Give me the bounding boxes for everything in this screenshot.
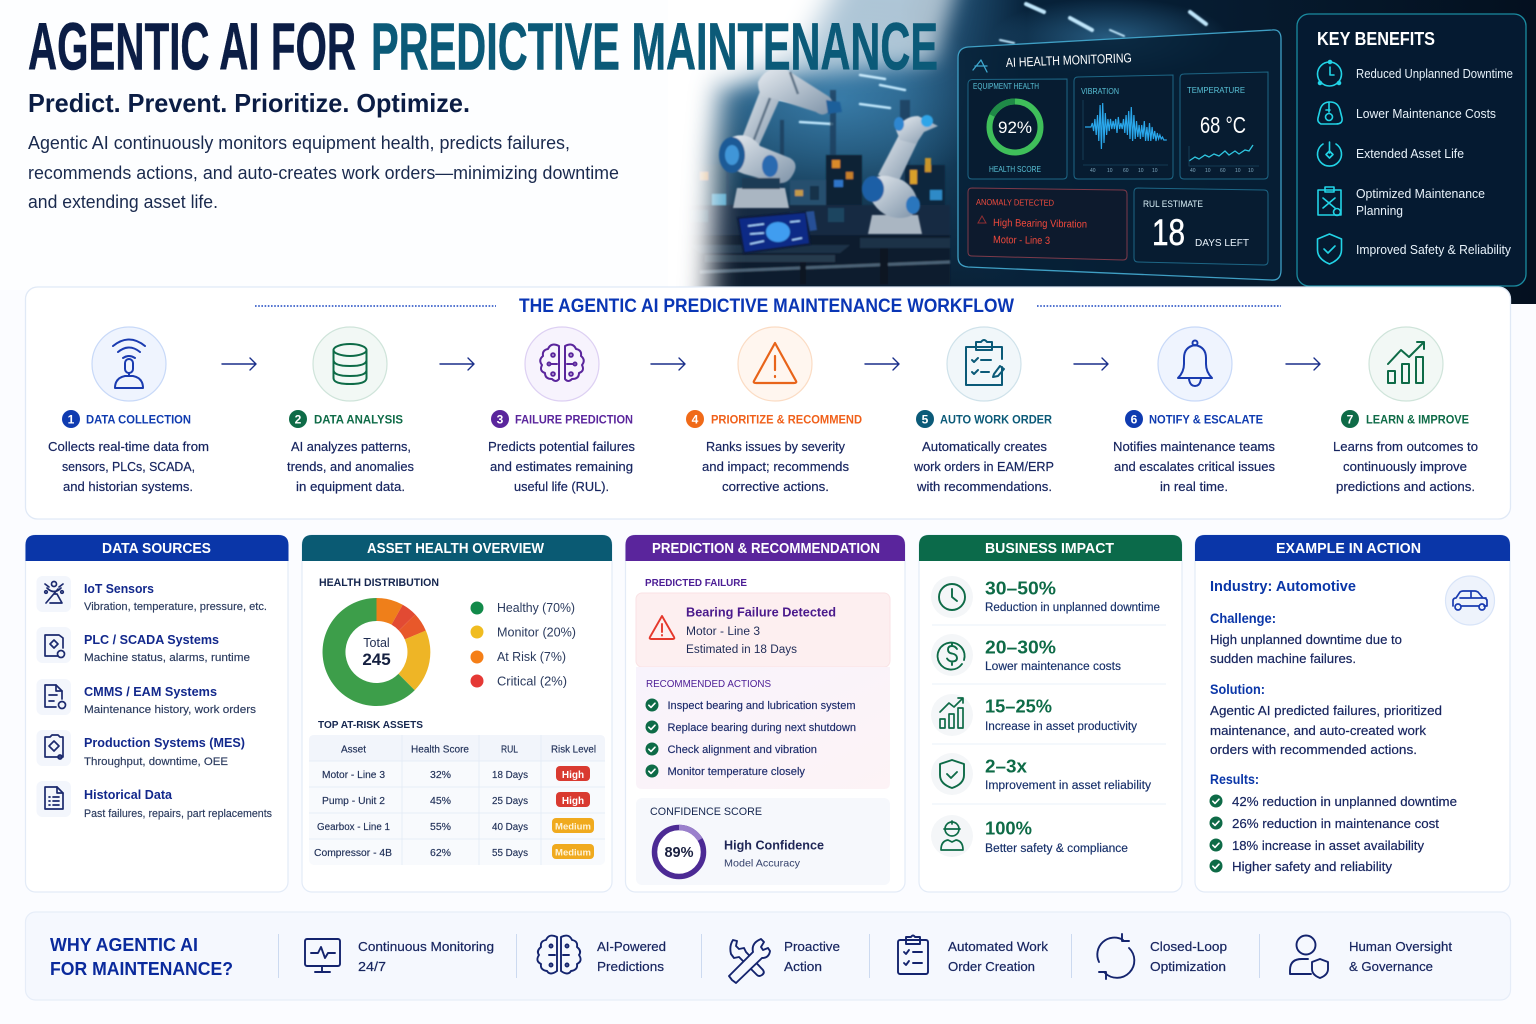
step 3: failure prediction: 3 [497,412,504,426]
step 2: data analysis [287,327,414,494]
benefit: reduced downtime [1318,60,1513,86]
hero banner [0,0,1536,330]
step 5: auto work order: with recommendations. [916,479,1052,494]
step 1: data collection: sensors, PLCs, SCADA, [62,459,195,474]
factory photo background [0,0,1536,330]
heading: PREDICTION & RECOMMENDATION [652,541,880,557]
item: automated work order [898,936,1049,974]
source: PLC SCADA: PLC / SCADA Systems [84,632,219,647]
step 2: data analysis: 2 [295,412,302,426]
at-risk table: High [562,770,584,781]
recommended actions [636,667,890,789]
step 3: failure prediction: FAILURE PREDICTION [515,412,633,426]
RUL estimate card [1134,188,1268,265]
donut chart: 245 [362,650,391,669]
legend: Monitor (20%) [497,626,576,640]
vibration card [1074,75,1173,179]
vibration card: 40 [1090,168,1096,174]
why heading [50,935,233,979]
step 6: notify and escalate: and escalates critical issues [1114,459,1275,474]
at-risk table: Risk Level [551,744,596,756]
source: CMMS EAM: CMMS / EAM Systems [84,684,217,699]
source: MES: Production Systems (MES) [84,735,245,750]
step 3: failure prediction: useful life (RUL). [514,479,609,494]
equipment health card: EQUIPMENT HEALTH [973,81,1039,91]
at-risk table: 32% [430,770,451,781]
benefit: safety [1318,234,1512,264]
item: proactive action: Action [784,959,822,974]
impact: reliability: Improvement in asset reliability [985,780,1151,792]
step 5: auto work order: AUTO WORK ORDER [940,412,1052,426]
donut chart [323,598,430,706]
step 4: prioritize and recommend [686,327,862,494]
source: MES: Throughput, downtime, OEE [84,756,228,768]
item: proactive action: Proactive [784,939,840,954]
anomaly card: High Bearing Vibration [993,217,1087,231]
step 7: learn and improve: Learns from outcomes to [1333,439,1478,454]
benefit: optimized planning: Planning [1356,204,1403,218]
at-risk table: Gearbox - Line 1 [317,822,390,833]
confidence score: Model Accuracy [724,858,801,870]
at-risk table [309,735,605,865]
at-risk table: 18 Days [492,770,528,781]
temperature card: 68 °C [1200,112,1246,138]
title: PREDICTIVE MAINTENANCE [371,10,938,84]
step 6: notify and escalate: 6 [1131,412,1138,426]
RUL estimate card: RUL ESTIMATE [1143,199,1203,209]
icon: car [1446,576,1494,625]
icon: sensor [92,327,166,401]
temperature card: 10 [1235,168,1241,174]
legend: Critical (2%) [497,674,567,688]
item: closed-loop optimization: Closed-Loop [1150,939,1227,954]
impact: safety [931,815,1128,857]
step 4: prioritize and recommend: 4 [692,412,699,426]
heading: DATA SOURCES [102,541,211,557]
at-risk table: Medium [555,822,591,832]
donut chart: Total [363,636,390,650]
item: continuous monitoring: 24/7 [358,959,386,974]
step 6: notify and escalate: NOTIFY & ESCALATE [1149,412,1263,426]
step 5: auto work order [913,327,1054,494]
at-risk table: RUL [501,744,518,756]
item: human oversight: & Governance [1349,959,1433,974]
legend: Healthy (70%) [497,601,575,615]
title [28,10,938,84]
panel: asset health overview [302,535,612,892]
step 4: prioritize and recommend: and impact; recommends [702,459,850,474]
step 3: failure prediction [488,327,635,494]
intro paragraph: recommends actions, and auto-creates work orders—minimizing downtime [28,162,619,183]
panel: example in action [1195,535,1510,892]
recommended actions: RECOMMENDED ACTIONS [646,678,771,690]
impact: reliability [931,753,1151,795]
panel: data sources [26,535,288,892]
step 6: notify and escalate [1113,327,1275,494]
benefit: optimized planning: Optimized Maintenance [1356,187,1485,201]
impact: downtime [931,576,1160,618]
equipment health card: HEALTH SCORE [989,164,1041,174]
item: continuous monitoring [305,939,494,974]
results: 26% reduction in maintenance cost [1232,816,1439,831]
at-risk table: High [562,796,584,807]
heading: EXAMPLE IN ACTION [1276,541,1421,557]
robot arm left [719,68,842,208]
intro paragraph: Agentic AI continuously monitors equipment health, predicts failures, [28,132,570,153]
icon: growth chart [1369,327,1443,401]
benefit: extended life: Extended Asset Life [1356,147,1464,161]
impact: downtime: 30–50% [985,578,1056,598]
source: PLC SCADA: Machine status, alarms, runtime [84,652,250,664]
source: IoT sensors: Vibration, temperature, pressure, etc. [84,601,267,613]
step 7: learn and improve [1333,327,1478,494]
solution: orders with recommended actions. [1210,742,1417,757]
at-risk table: 55% [430,822,451,833]
step 1: data collection: and historian systems. [63,479,193,494]
results: 42% reduction in unplanned downtime [1232,794,1457,809]
step 2: data analysis: AI analyzes patterns, [291,439,411,454]
results [1210,772,1457,874]
vibration card: 10 [1107,168,1113,174]
item: human oversight: Human Oversight [1349,939,1452,954]
step 5: auto work order: work orders in EAM/ERP [913,459,1054,474]
vibration card: 60 [1123,168,1129,174]
temperature card: 10 [1248,168,1254,174]
results: Higher safety and reliability [1232,859,1393,874]
industry label: Industry: Automotive [1210,578,1356,595]
subtitle: Predict. Prevent. Prioritize. Optimize. [28,88,470,118]
at-risk table: 62% [430,848,451,859]
anomaly card: ANOMALY DETECTED [976,197,1054,208]
confidence score [636,798,890,885]
heading: ASSET HEALTH OVERVIEW [367,541,544,557]
predicted failure alert [636,593,890,667]
challenge [1210,611,1402,666]
at-risk table: Medium [555,848,591,858]
arrow 1 [222,358,256,370]
source: historical data: Past failures, repairs, part replacements [84,808,272,820]
arrow 6 [1286,358,1320,370]
why heading: FOR MAINTENANCE? [50,959,233,979]
challenge: Challenge: [1210,611,1276,626]
step 2: data analysis: in equipment data. [296,479,405,494]
arrow 4 [865,358,899,370]
impact: productivity: Increase in asset productivity [985,721,1137,733]
confidence score: 89% [664,845,694,861]
benefit: lower costs [1318,102,1496,124]
source: IoT sensors: IoT Sensors [84,581,154,596]
subheading: health distribution: HEALTH DISTRIBUTION [319,577,439,589]
step 1: data collection: DATA COLLECTION [86,412,191,426]
vibration card: 10 [1138,168,1144,174]
RUL estimate card: DAYS LEFT [1195,237,1250,249]
item: automated work order: Order Creation [948,959,1035,974]
predicted failure alert: Motor - Line 3 [686,626,760,638]
at-risk table: 40 Days [492,822,528,833]
legend: At Risk (7%) [497,650,566,664]
step 4: prioritize and recommend: PRIORITIZE & RECOMMEND [711,412,862,426]
step 5: auto work order: Automatically creates [922,439,1047,454]
intro paragraph: and extending asset life. [28,191,218,212]
impact: productivity [931,694,1137,736]
icon: database [313,327,387,401]
impact: reliability: 2–3x [985,756,1027,776]
title: AGENTIC AI FOR [28,10,356,84]
step 5: auto work order: 5 [922,412,929,426]
workflow heading: THE AGENTIC AI PREDICTIVE MAINTENANCE WORKFLOW [519,296,1014,317]
step 6: notify and escalate: Notifies maintenance teams [1113,439,1275,454]
temperature card: 10 [1205,168,1211,174]
step 3: failure prediction: and estimates remaining [490,459,633,474]
vibration card: VIBRATION [1081,86,1119,96]
temperature card [1180,72,1268,179]
panel: key benefits [1297,14,1526,286]
source: PLC SCADA [36,627,250,664]
impact: costs [931,634,1121,676]
step 2: data analysis: trends, and anomalies [287,459,414,474]
arrow 3 [651,358,685,370]
white fade overlays [0,0,965,330]
impact: costs: Lower maintenance costs [985,661,1121,673]
at-risk table: Compressor - 4B [314,848,392,859]
anomaly card [968,188,1127,260]
robot arm right [862,115,938,234]
heading: BUSINESS IMPACT [985,541,1114,557]
icon: brain [525,327,599,401]
at-risk table: 25 Days [492,796,528,807]
source: CMMS EAM: Maintenance history, work orders [84,704,257,716]
equipment health card [968,79,1067,179]
predicted failure alert: Estimated in 18 Days [686,644,797,656]
at-risk table: 55 Days [492,848,528,859]
anomaly card: Motor - Line 3 [993,234,1050,247]
step 2: data analysis: DATA ANALYSIS [314,412,403,426]
AI health monitoring dashboard [958,30,1281,280]
step 7: learn and improve: predictions and actions. [1336,479,1475,494]
confidence score: High Confidence [724,838,824,852]
at-risk table: 45% [430,796,451,807]
recommended actions: Check alignment and vibration [668,744,817,756]
icon: clipboard [947,327,1021,401]
impact: productivity: 15–25% [985,696,1052,716]
confidence score: CONFIDENCE SCORE [650,806,762,818]
item: AI-powered predictions [537,936,666,974]
step 4: prioritize and recommend: corrective actions. [722,479,829,494]
item: AI-powered predictions: Predictions [597,959,665,974]
RUL estimate card: 18 [1152,212,1185,253]
vibration card: 10 [1152,168,1158,174]
arrow 5 [1074,358,1108,370]
key benefits heading: KEY BENEFITS [1317,29,1435,49]
panel: why agentic AI [26,912,1510,1000]
step 4: prioritize and recommend: Ranks issues by severity [706,439,845,454]
recommended actions: Inspect bearing and lubrication system [668,700,856,712]
temperature card: 40 [1190,168,1196,174]
source: historical data [36,781,272,820]
at-risk table: Pump - Unit 2 [322,796,385,807]
item: AI-powered predictions: AI-Powered [597,939,666,954]
at-risk table: Asset [341,744,366,756]
item: closed-loop optimization [1097,934,1227,979]
dashboard heading: AI HEALTH MONITORING [1006,50,1132,70]
solution: Agentic AI predicted failures, prioritized [1210,703,1442,718]
step 6: notify and escalate: in real time. [1160,479,1228,494]
step 7: learn and improve: 7 [1347,412,1354,426]
why heading: WHY AGENTIC AI [50,935,198,955]
control screen [738,211,817,253]
equipment health card: 92% [998,118,1032,137]
arrow 2 [440,358,474,370]
recommended actions: Replace bearing during next shutdown [668,722,856,734]
legend [470,601,576,688]
predicted failure alert: Bearing Failure Detected [686,604,836,620]
impact: downtime: Reduction in unplanned downtime [985,602,1160,614]
benefit: optimized planning [1318,187,1485,218]
step 3: failure prediction: Predicts potential failures [488,439,635,454]
item: human oversight [1290,936,1452,978]
recommended actions: Monitor temperature closely [668,766,805,778]
temperature card: 60 [1220,168,1226,174]
panel: workflow [26,287,1510,519]
panel: prediction and recommendation [626,535,905,892]
results: Results: [1210,772,1259,787]
subheading: predicted failure: PREDICTED FAILURE [645,577,747,589]
item: continuous monitoring: Continuous Monitoring [358,939,494,954]
challenge: High unplanned downtime due to [1210,632,1402,647]
source: historical data: Historical Data [84,787,173,802]
intro paragraph [28,132,619,212]
benefit: reduced downtime: Reduced Unplanned Downtime [1356,67,1513,81]
icon: bell [1158,327,1232,401]
item: closed-loop optimization: Optimization [1150,959,1226,974]
at-risk table: Motor - Line 3 [322,770,385,781]
temperature card: TEMPERATURE [1187,85,1245,95]
panel: business impact [919,535,1182,892]
challenge: sudden machine failures. [1210,651,1356,666]
solution [1210,682,1442,757]
icon: warning [738,327,812,401]
solution: maintenance, and auto-created work [1210,723,1427,738]
results: 18% increase in asset availability [1232,838,1424,853]
solution: Solution: [1210,682,1265,697]
step 1: data collection: 1 [68,412,75,426]
source: IoT sensors [36,576,267,613]
benefit: safety: Improved Safety & Reliability [1356,243,1512,257]
impact: costs: 20–30% [985,638,1056,658]
step 1: data collection: Collects real-time data from [48,439,209,454]
impact: safety: 100% [985,818,1032,838]
item: automated work order: Automated Work [948,939,1049,954]
item: proactive action [729,939,840,983]
source: MES [36,730,245,768]
step 1: data collection [48,327,209,494]
step 7: learn and improve: LEARN & IMPROVE [1366,412,1469,426]
source: CMMS EAM [36,679,257,716]
impact: safety: Better safety & compliance [985,843,1128,855]
benefit: lower costs: Lower Maintenance Costs [1356,107,1496,121]
dashboard logo [973,60,987,72]
step 7: learn and improve: continuously improve [1343,459,1467,474]
benefit: extended life [1318,142,1464,166]
at-risk table: Health Score [411,744,469,756]
subheading: top at-risk assets: TOP AT-RISK ASSETS [318,719,423,731]
